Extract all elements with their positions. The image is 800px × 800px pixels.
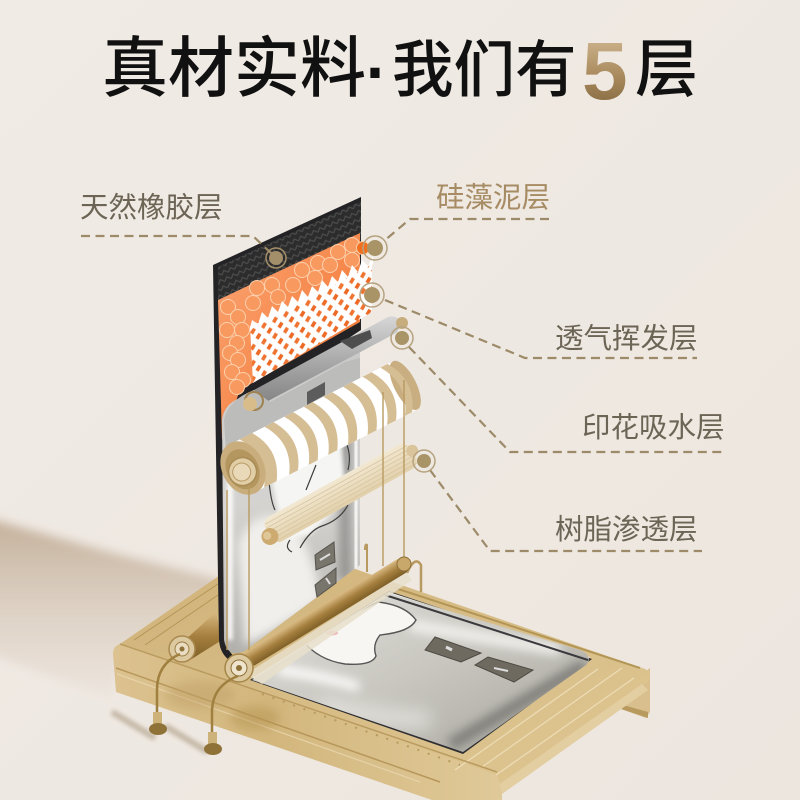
base tray [113, 540, 650, 800]
label: natural latex layer: 天然橡胶层 [80, 192, 223, 224]
back roller [169, 612, 222, 662]
gold fold roller with film [225, 556, 412, 684]
label: diatom mud layer [363, 182, 550, 260]
label: diatom mud layer: 硅藻泥层 [436, 182, 550, 214]
label: printed absorbent layer: 印花吸水层 [582, 412, 725, 444]
title: 5 [582, 26, 628, 117]
vertical BA tags [315, 542, 336, 597]
label: breathable layer: 透气挥发层 [555, 323, 698, 355]
white breathable mesh [250, 256, 373, 383]
title: 层 [635, 35, 698, 105]
label: printed absorbent layer [391, 327, 725, 452]
title: 真材实料 [102, 31, 366, 105]
black rubber layer [213, 197, 361, 662]
title [102, 13, 698, 120]
mat cartoon patch [302, 602, 416, 664]
cast shadow [0, 516, 222, 752]
label: resin penetration layer: 树脂渗透层 [555, 514, 698, 546]
mat BA tags [425, 637, 533, 682]
mat: lying silver layer [250, 591, 592, 754]
title: · [359, 13, 391, 120]
label: breathable layer [360, 283, 698, 358]
corrugated resin roller [254, 437, 425, 549]
gold wires [227, 380, 421, 655]
label: resin penetration layer [413, 450, 702, 551]
title: 我们有 [392, 36, 577, 105]
grey top roll with tag [224, 316, 408, 455]
orange layer with beads [218, 233, 373, 440]
silver printed layer [222, 352, 360, 654]
label: natural latex layer [80, 192, 286, 268]
feet and cables [149, 654, 238, 755]
striped roller [212, 355, 428, 502]
printed cartoon outline [268, 440, 349, 552]
